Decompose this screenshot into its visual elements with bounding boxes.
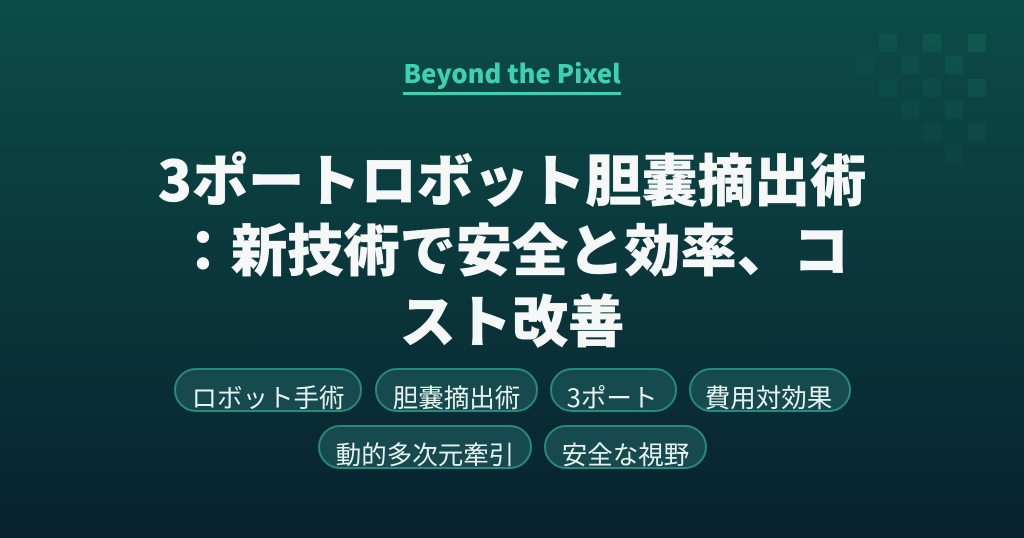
tag: 動的多次元牽引: 動的多次元牽引: [336, 434, 514, 472]
title: [158, 137, 866, 359]
title: ：新技術で安全と効率、コ: [175, 207, 849, 288]
tag: 安全な視野: 安全な視野: [562, 434, 689, 472]
brand label: Beyond the Pixel: Beyond the Pixel: [403, 54, 621, 91]
tag: 3ポート: 3ポート: [567, 378, 657, 414]
title: スト改善: [400, 278, 624, 359]
tag: 費用対効果: 費用対効果: [705, 378, 832, 414]
tag: ロボット手術: [174, 368, 362, 412]
tag: 費用対効果: [689, 368, 851, 412]
tag row 2: [318, 425, 707, 472]
tag: 胆嚢摘出術: 胆嚢摘出術: [393, 378, 520, 414]
tag: 3ポート: [550, 368, 677, 412]
tag row 1: [174, 368, 851, 414]
tag: 動的多次元牽引: [318, 425, 532, 469]
decorative square grid: [923, 34, 986, 97]
tag: 胆嚢摘出術: [375, 368, 538, 412]
tag: 安全な視野: [544, 425, 707, 469]
title: 3ポートロボット胆嚢摘出術: [158, 137, 866, 218]
tag: ロボット手術: ロボット手術: [191, 378, 344, 414]
